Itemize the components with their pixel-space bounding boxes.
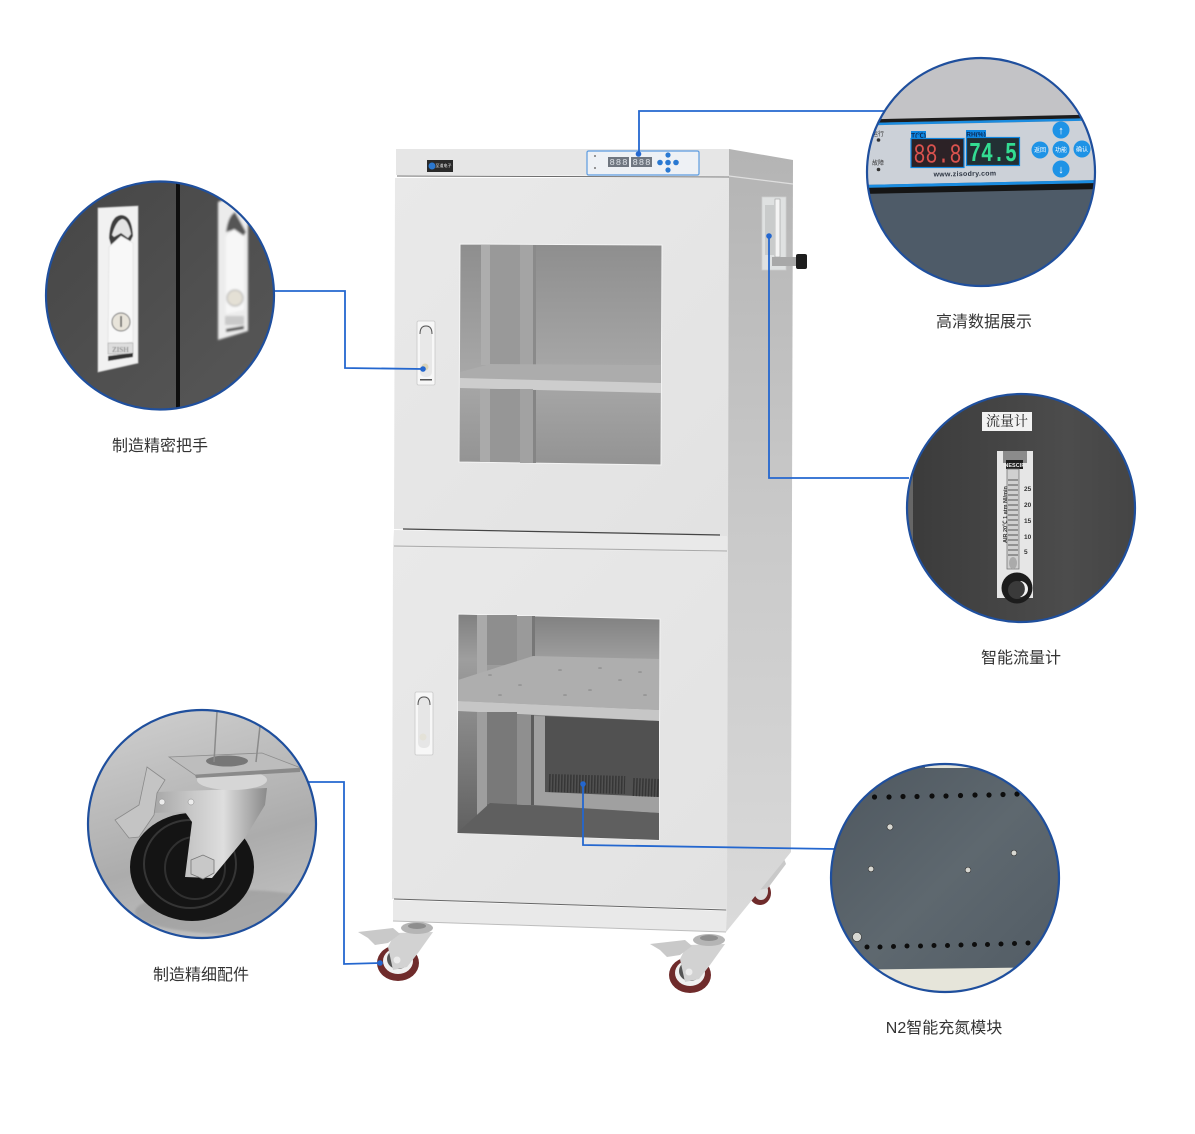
brand logo (427, 160, 453, 172)
lower door (392, 547, 728, 909)
connector: nitrogen module (580, 781, 835, 849)
flowmeter body: 5 (1024, 549, 1028, 556)
flowmeter body: NESCIF (1004, 463, 1025, 469)
indicators (872, 130, 884, 171)
flowmeter sticker (982, 412, 1032, 431)
back caster (749, 856, 786, 905)
screws (852, 824, 1017, 942)
temperature readout (911, 131, 964, 172)
upper window (459, 244, 662, 465)
fork (115, 767, 267, 879)
connector: caster (308, 782, 383, 966)
mounting plate (169, 712, 301, 778)
panel: flowmeter detail circle (900, 390, 1140, 630)
buttons: ↓ (1058, 164, 1064, 176)
flowmeter body: 15 (1024, 518, 1032, 525)
flowmeter on side (762, 197, 807, 270)
flowmeter body: 25 (1024, 486, 1032, 493)
door gap and middle band (393, 530, 727, 552)
wheel (130, 813, 254, 921)
flowmeter body: 20 (1024, 502, 1032, 509)
buttons: ↑ (1058, 125, 1064, 137)
buttons: 功能 (1055, 146, 1067, 154)
indicators: 故障 (872, 159, 884, 167)
left handle (98, 206, 138, 372)
upper handle (417, 321, 435, 385)
control panel: 888 (610, 158, 628, 168)
website: www.zisodry.com (932, 170, 996, 179)
label: handle: 制造精密把手 (112, 437, 208, 455)
panel: display detail circle (866, 56, 1096, 288)
base band (393, 900, 727, 932)
temperature readout: 88.8 (914, 142, 962, 172)
label: flowmeter: 智能流量计 (981, 649, 1061, 667)
lower handle (415, 692, 433, 755)
label: nitrogen module: N2智能充氮模块 (886, 1019, 1002, 1037)
flowmeter sticker: 流量计 (986, 413, 1028, 430)
panel: nitrogen module detail circle (825, 760, 1065, 1000)
connector: handle (273, 291, 426, 372)
buttons: 确认 (1076, 146, 1088, 154)
humidity readout: RH(%) (966, 132, 986, 138)
lower window (457, 614, 660, 840)
panel: caster detail circle (86, 708, 318, 940)
upper door (394, 178, 729, 537)
buttons: 返回 (1034, 147, 1046, 154)
label: caster: 制造精细配件 (153, 966, 249, 984)
cabinet product illustration (358, 149, 807, 993)
buttons (1032, 122, 1090, 178)
humidity readout: 74.5 (969, 140, 1017, 170)
flowmeter body (997, 451, 1033, 604)
front right caster (650, 934, 725, 993)
cabinet side panel (726, 149, 793, 932)
flowmeter body: AIR 20℃ 1 atm Nl/min (1002, 486, 1009, 543)
cabinet top panel (396, 149, 729, 176)
front left caster (358, 922, 433, 981)
control panel: 888 (632, 158, 650, 168)
perforation rows (864, 791, 1030, 950)
flowmeter body: 10 (1024, 534, 1032, 541)
temperature readout: T(℃) (911, 132, 926, 140)
panel: handle detail circle (40, 175, 280, 415)
label: display: 高清数据展示 (936, 313, 1032, 331)
humidity readout (966, 130, 1020, 170)
control panel (587, 151, 699, 175)
connector: flowmeter (766, 233, 909, 478)
connector: display (636, 111, 885, 157)
indicators: 运行 (872, 130, 884, 138)
right handle (218, 190, 248, 340)
brand logo: 至道电子 (436, 162, 452, 168)
left handle: ZISH (112, 345, 129, 354)
